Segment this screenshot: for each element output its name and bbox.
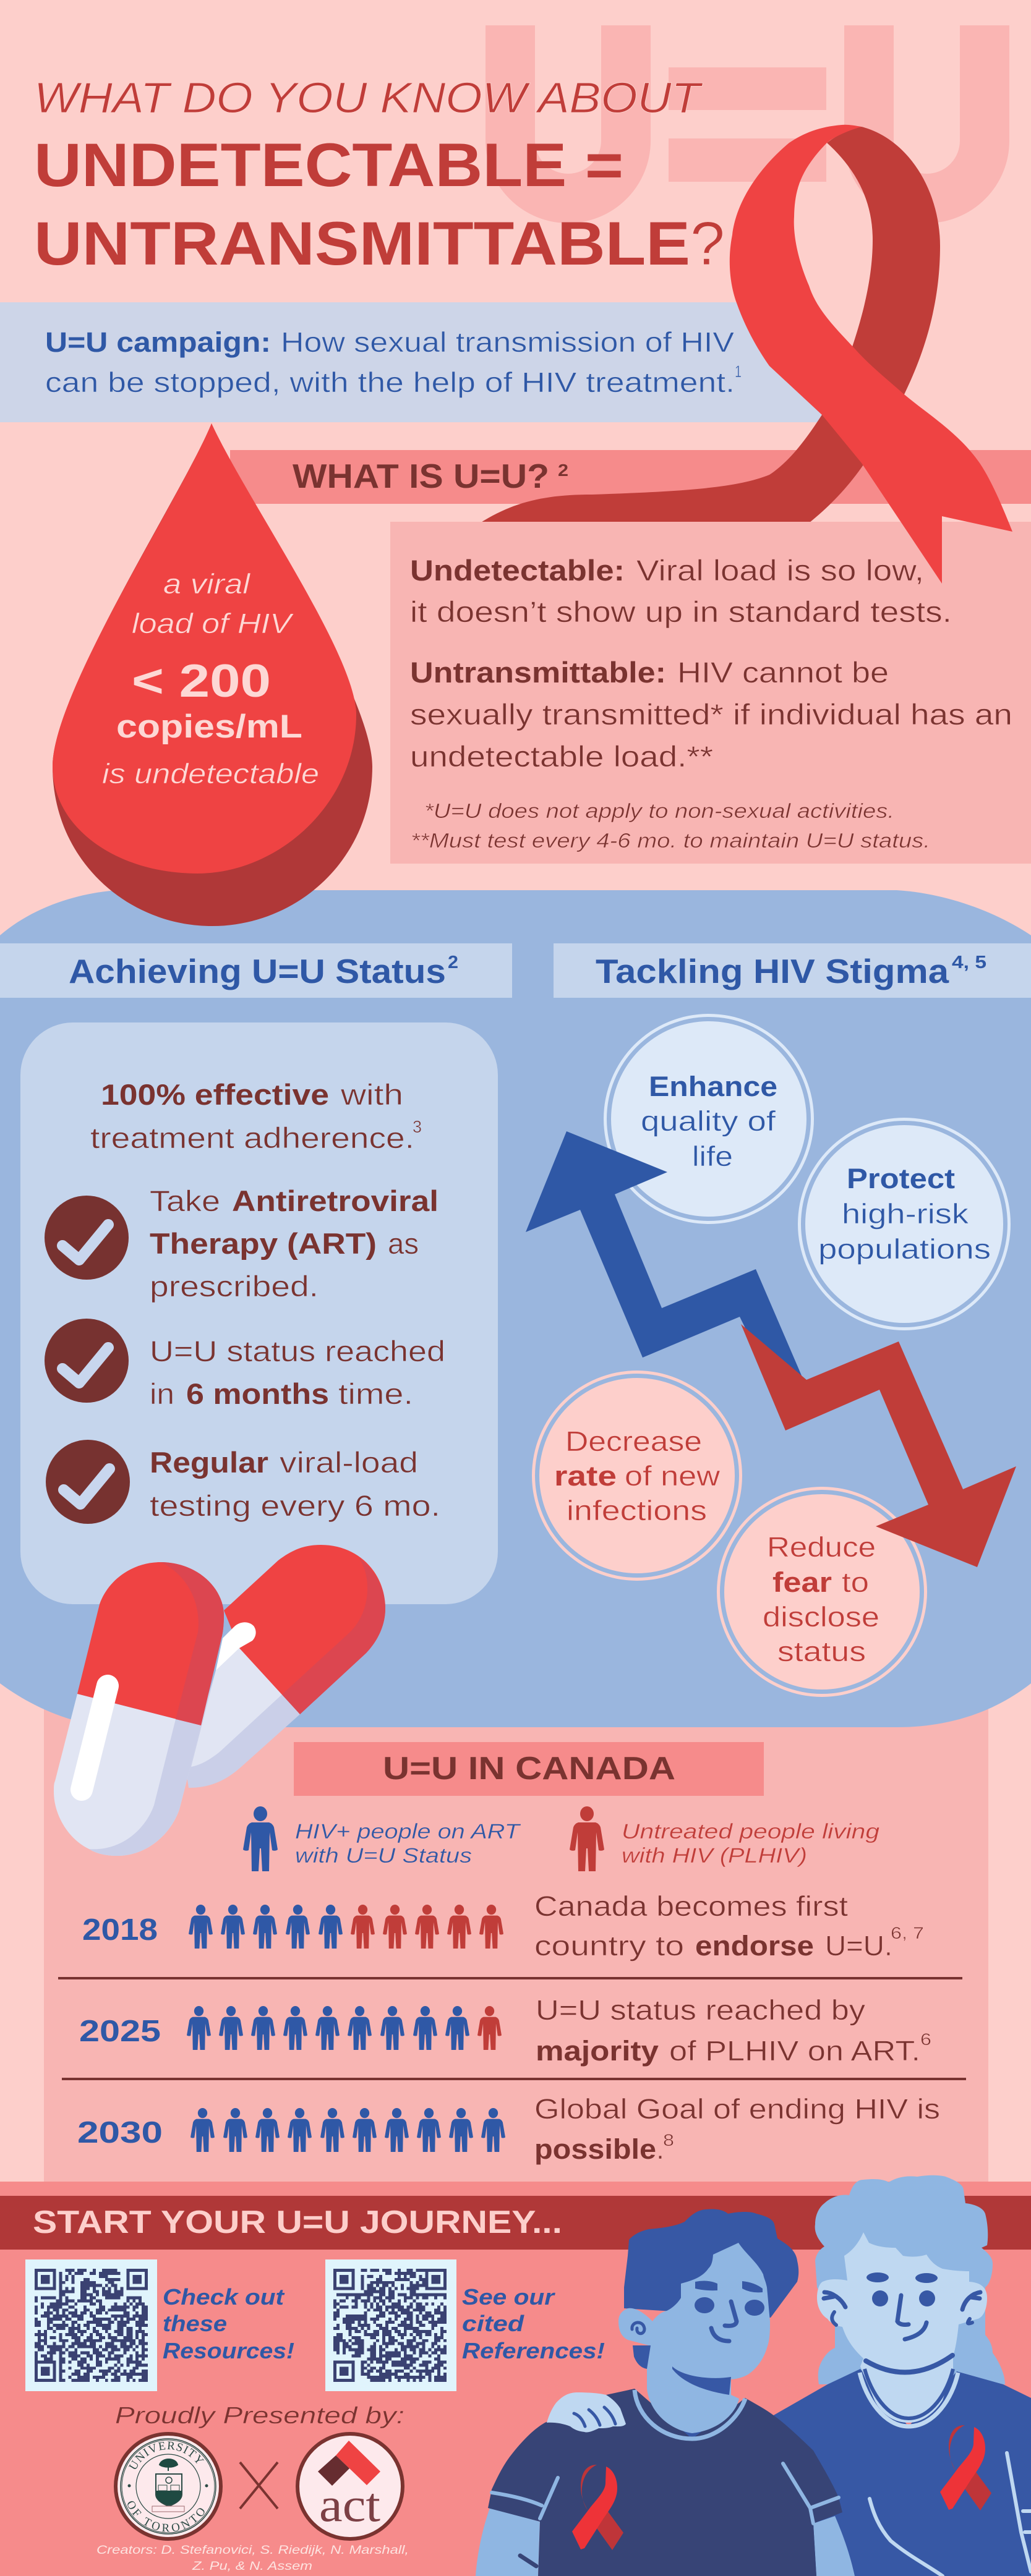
footnotes: *U=U does not apply to non-sexual activities. [424,799,894,822]
heading: Tackling HIV Stigma: Tackling HIV Stigma [596,952,949,990]
arrow: stigma up [526,1131,803,1385]
left pill [54,1562,224,1856]
check item: 6 months [45,1319,445,1410]
heading: Start your U=U journey [0,2196,1031,2250]
circle: enhance quality of life: life [692,1141,733,1172]
effectiveness statement: treatment adherence. [90,1121,414,1154]
year 2030: 2030 [77,2116,163,2149]
drop text: a viral load of HIV: a viral [163,568,251,600]
text: creators [96,2544,409,2573]
heading: Tackling HIV Stigma [554,943,1031,998]
heading: Achieving U=U Status: Achieving U=U Status [69,952,446,990]
heading bar: What is U=U [230,450,1031,504]
icon: ribbon on left shirt [572,2465,623,2550]
QR code label: references [462,2284,605,2363]
QR code label: resources: these [163,2311,227,2336]
right pill [186,1545,385,1788]
check item: viral-load testing [46,1440,440,1524]
panel: U=U campaign: can be stopped, with the help of HIV treatment. [45,367,735,398]
panel: U=U campaign [0,302,829,422]
check item: viral-load testing: Regular [150,1446,268,1479]
panel: U=U campaign: How sexual transmission of HIV [281,326,734,358]
circle: reduce fear to disclose status: to [842,1566,869,1598]
text 2025: majority [536,2035,659,2067]
undetectable definition: Viral load is so low, [636,554,924,587]
legend: people on ART [243,1806,521,1871]
circle: decrease rate of new infections: infections [567,1495,707,1526]
title line 3: UNTRANSMITTABLE [34,209,690,278]
check item: 6 months: 6 months [186,1377,329,1410]
check item: viral-load testing: viral-load [280,1446,418,1479]
row: 2018 [82,1890,924,1962]
drop text: is undetectable: is undetectable [102,758,319,789]
circle: protect high-risk populations [798,1118,1011,1330]
drop unit: copies/mL [116,708,302,745]
people chart 2018 [189,1905,503,1949]
left person [476,2209,855,2576]
QR code label: resources [163,2284,294,2363]
title line 2: UNDETECTABLE = [34,130,623,199]
text 2018: endorse [695,1930,814,1962]
legend: untreated people: with HIV (PLHIV) [622,1844,807,1868]
text 2025 [536,1994,931,2067]
circle: reduce fear to disclose status [717,1487,927,1697]
blue section background [44,1669,988,2188]
heading: Achieving U=U Status [0,943,512,998]
panel: blue section [0,890,1031,1727]
check item: take ART: as [388,1227,419,1260]
ribbon back [480,127,940,523]
heading: Tackling HIV Stigma: 4, 5 [952,953,986,972]
legend: people on ART: with U=U Status [295,1844,472,1868]
circle: reduce fear to disclose status: disclose [763,1601,879,1633]
check item: 6 months: U=U status reached [150,1335,445,1367]
logo: ACT [297,2434,403,2539]
circle: enhance quality of life: Enhance [649,1071,777,1102]
untransmittable definition: undetectable load.** [410,740,713,773]
text 2025: of PLHIV on ART. [669,2035,920,2067]
check item: take ART: Take [150,1184,220,1217]
circle: protect high-risk populations: populations [818,1233,991,1265]
text 2030: . [656,2133,664,2165]
people chart 2030 [190,2108,505,2152]
title question mark: ? [690,209,725,278]
undetectable definition: Undetectable: [410,554,625,587]
undetectable definition: it doesn’t show up in standard tests. [410,595,952,628]
heading: Achieving U=U Status: 2 [448,953,458,972]
text 2030: Global Goal of ending HIV is [534,2093,940,2125]
ribbon front [730,125,1012,584]
circle: decrease rate of new infections: Decrease [565,1426,702,1457]
QR code label: references: See our [462,2284,555,2310]
text: proudly presented by: Proudly Presented by: [115,2403,404,2429]
drop number: < 200 [132,655,271,707]
heading: U=U in Canada [294,1742,764,1796]
check item: take ART: prescribed. [150,1270,319,1303]
text 2025: 6 [920,2030,931,2049]
text: creators: Z. Pu, & N. Assem [192,2560,312,2573]
text 2030 [534,2093,940,2165]
icon: ribbon on right shirt [940,2425,991,2510]
people chart 2025 [187,2006,502,2050]
circle: decrease rate of new infections: of new [625,1460,721,1492]
watermark: U=U [510,25,985,198]
text 2018: U=U. [825,1930,892,1962]
text 2030: possible [534,2133,656,2165]
legend: untreated people [570,1806,879,1871]
title [34,74,725,278]
icon: X [240,2462,278,2509]
blood drop [53,423,372,926]
check item: viral-load testing: testing every 6 mo. [150,1489,440,1522]
circle: reduce fear to disclose status: Reduce [767,1531,876,1563]
footnotes: **Must test every 4-6 mo. to maintain U=U status. [411,829,930,852]
text 2018: Canada becomes first [534,1890,849,1922]
illustration: two people [476,2175,1031,2576]
icon: pills [54,1545,385,1856]
QR code label: references: cited [462,2311,524,2336]
drop text: a viral load of HIV: load of HIV [132,608,294,639]
footnotes [411,799,930,852]
text: creators: Creators: D. Stefanovici, S. Riedijk, N. Marshall, [96,2544,409,2557]
untransmittable definition [410,656,1012,773]
panel: achieving status card [20,1022,498,1604]
effectiveness statement: 100% effective [101,1078,329,1111]
text 2030: 8 [663,2131,674,2149]
effectiveness statement: 3 [413,1117,422,1136]
heading: U=U in Canada: U=U IN CANADA [383,1751,675,1787]
circle: protect high-risk populations: high-risk [842,1198,969,1230]
text 2018: country to [534,1930,684,1962]
effectiveness statement [90,1078,422,1154]
circle: enhance quality of life: quality of [641,1105,776,1137]
title kicker: WHAT DO YOU KNOW ABOUT [34,74,703,122]
undetectable definition [410,554,952,628]
year 2025: 2025 [79,2015,161,2048]
text 2018: 6, 7 [891,1924,924,1942]
text 2025: U=U status reached by [536,1994,866,2026]
panel: U=U campaign: 1 [735,362,742,381]
check item: take ART: Therapy (ART) [150,1227,377,1260]
check item: 6 months: time. [338,1377,413,1410]
year 2018: 2018 [82,1913,158,1947]
QR code: references [325,2259,456,2391]
logo: ACT: act [319,2478,380,2531]
circle: protect high-risk populations: Protect [847,1163,955,1194]
circle: reduce fear to disclose status: status [777,1636,866,1667]
text 2018 [534,1890,924,1962]
panel: footer [0,2182,1031,2576]
circle: reduce fear to disclose status: fear [772,1566,832,1598]
circle: enhance quality of life [604,1014,814,1224]
heading bar: What is U=U: WHAT IS U=U? [293,457,549,495]
untransmittable definition: sexually transmitted* if individual has an [410,698,1012,731]
QR code label: resources: Resources! [163,2338,294,2363]
QR code: resources [25,2259,157,2391]
drop text: a viral load of HIV [132,568,294,639]
check item: take ART [45,1184,438,1303]
row: 2025 [79,1994,931,2067]
check item: 6 months: in [150,1377,174,1410]
right person [618,2175,1031,2576]
panel: definitions [390,522,1031,864]
legend: people on ART: HIV+ people on ART [295,1820,521,1843]
circle: decrease rate of new infections [532,1371,742,1581]
arrow: stigma down [741,1324,1016,1567]
heading: Start your U=U journey: START YOUR U=U JOURNEY... [33,2204,562,2240]
untransmittable definition: Untransmittable: [410,656,666,689]
heading bar: What is U=U: 2 [558,461,568,480]
logo: University of Toronto: OF TORONTO [127,2501,205,2532]
legend: untreated people: Untreated people living [622,1820,879,1843]
check item: take ART: Antiretroviral [232,1184,438,1217]
untransmittable definition: HIV cannot be [677,656,889,689]
logo: University of Toronto: UNIVERSITY [129,2441,204,2469]
QR code label: references: References! [462,2338,605,2363]
panel: U=U campaign: U=U campaign: [45,326,271,358]
logo: University of Toronto [114,2432,223,2541]
effectiveness statement: with [340,1078,403,1111]
circle: decrease rate of new infections: rate [554,1460,617,1492]
QR code label: resources: Check out [163,2284,285,2310]
row: 2030 [77,2093,940,2165]
